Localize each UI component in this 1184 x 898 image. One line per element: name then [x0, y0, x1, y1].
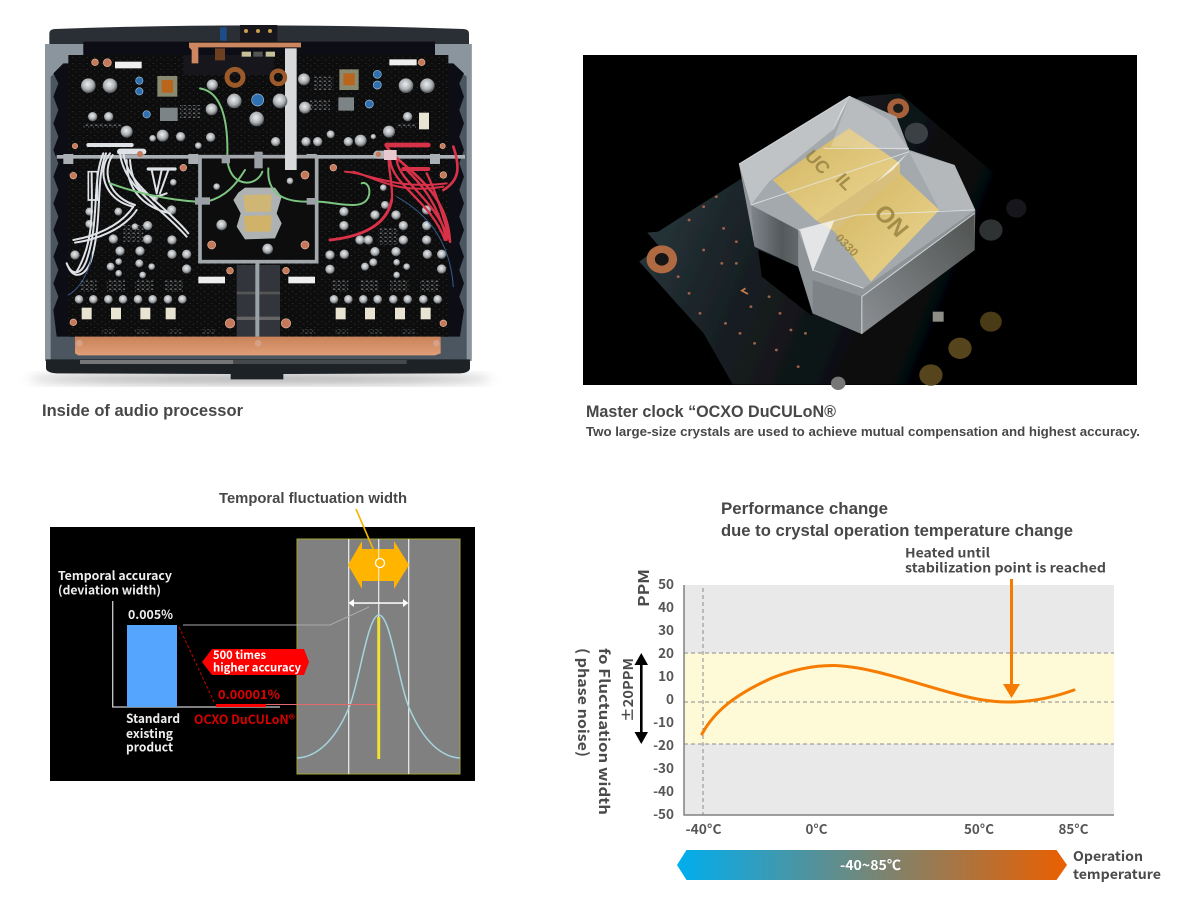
bar: standard product — [127, 625, 177, 707]
glass edges — [739, 96, 975, 334]
y axis labels: 10 — [658, 665, 674, 685]
copper screws — [70, 59, 447, 328]
x axis labels: 85°C — [1058, 818, 1089, 838]
performance curve — [702, 666, 1074, 734]
relays — [82, 113, 431, 319]
waveform panel — [297, 539, 460, 774]
badge: 500 times higher accuracy: 500 times — [213, 647, 266, 663]
y axis labels: -40 — [653, 780, 674, 800]
caption: master clock — [586, 403, 1140, 439]
transformers — [157, 69, 359, 121]
label: standard existing product: product — [126, 736, 174, 756]
engraved text on crystal: ON — [868, 201, 913, 242]
engraved text on crystal: 0330 — [832, 231, 862, 259]
label: standard existing product: existing — [126, 723, 174, 742]
annotation: heated until stabilization — [905, 542, 1106, 576]
temperature range bar: -40~85℃ — [840, 854, 902, 874]
front panel — [46, 359, 470, 379]
heading: performance change: Performance change — [721, 500, 888, 518]
glass reflections — [739, 96, 975, 272]
caption: master clock: Master clock “OCXO DuCULoN® — [586, 403, 836, 421]
bottom copper bar — [75, 337, 441, 355]
label: OCXO DuCULoN: OCXO DuCULoN® — [194, 709, 295, 728]
label: operation temperature — [1073, 845, 1161, 883]
crystal compartment — [200, 157, 317, 262]
x axis labels: -40°C — [686, 818, 722, 838]
label: temporal accuracy: Temporal accuracy — [58, 567, 172, 584]
label: standard existing product: Standard — [126, 708, 180, 727]
arrow: plus minus 20 PPM range — [634, 653, 648, 744]
value: 0.00001%: 0.00001% — [218, 684, 280, 703]
caption: master clock: Two large-size crystals are used to achieve mutual compensation and highest accuracy. — [586, 425, 1140, 439]
red wires — [330, 145, 457, 242]
label: phase noise: ( phase noise) — [573, 648, 594, 757]
label: fo fluctuation width: fo Fluctuation width — [594, 648, 615, 815]
callout leader — [356, 509, 384, 568]
y axis labels: 40 — [658, 596, 674, 616]
icon: orange double arrow — [348, 541, 409, 589]
badge: 500 times higher accuracy — [202, 647, 309, 676]
heat sink stem — [237, 263, 280, 337]
value: 0.005%: 0.005% — [128, 604, 173, 623]
front gold crystal — [835, 173, 939, 282]
y axis labels: 50 — [658, 573, 674, 593]
axes — [113, 601, 280, 707]
caption: inside of audio processor: Inside of audio processor — [42, 402, 244, 420]
crystal case — [739, 96, 975, 334]
engraved text on crystal: IL — [831, 170, 858, 194]
engraved text on crystal — [801, 146, 913, 259]
circuit board — [639, 93, 1035, 390]
heading: performance change: due to crystal operation temperature change — [721, 522, 1073, 540]
arrow: stabilization point — [1003, 579, 1020, 698]
top copper bar — [189, 43, 301, 63]
toroids — [227, 69, 285, 85]
chassis rail — [57, 154, 465, 164]
y axis labels: 0 — [666, 688, 674, 708]
connector lines — [179, 607, 377, 704]
back gold crystal — [773, 128, 900, 221]
label: standard existing product — [126, 708, 180, 756]
bell curve — [297, 615, 460, 758]
label: operation temperature: temperature — [1073, 863, 1161, 883]
chart: PPM vs temperature — [653, 573, 1114, 838]
heading: performance change — [721, 500, 1073, 540]
blue signal wires — [68, 197, 453, 295]
blue capacitors — [136, 70, 381, 118]
x axis labels: 0°C — [806, 818, 828, 838]
y axis labels: 20 — [658, 642, 674, 662]
y axis labels: -50 — [653, 803, 674, 823]
y axis labels — [653, 573, 674, 823]
y axis labels: -30 — [653, 757, 674, 777]
y axis labels: 30 — [658, 619, 674, 639]
annotation: heated until stabilization: stabilization point is reached — [905, 558, 1106, 576]
wire connectors — [195, 152, 317, 205]
axis title: PPM: PPM — [633, 569, 654, 607]
arrow: deviation width — [348, 599, 408, 607]
label: temporal accuracy: (deviation width) — [58, 582, 161, 598]
yellow centre line — [377, 617, 380, 759]
green wires — [110, 88, 369, 205]
wire clamps — [137, 150, 397, 160]
badge: 500 times higher accuracy: higher accuracy — [213, 660, 301, 676]
small surface mount parts — [80, 77, 438, 333]
y axis labels: -10 — [653, 711, 674, 731]
label: operation temperature: Operation — [1073, 845, 1143, 865]
label: plus minus 20 PPM: ±20PPM — [617, 658, 637, 722]
x axis labels — [686, 818, 1089, 838]
white ribbon — [285, 48, 297, 170]
annotation: heated until stabilization: Heated until — [905, 542, 990, 562]
white wires — [67, 145, 188, 275]
white board labels — [115, 59, 417, 283]
photo: OCXO DuCULoN crystal module — [583, 55, 1137, 390]
engraved text on crystal: UC — [801, 146, 834, 178]
x axis labels: 50°C — [964, 818, 994, 838]
heading: temporal fluctuation width: Temporal fluctuation width — [219, 490, 407, 507]
temperature range bar — [677, 850, 1067, 880]
y axis labels: -20 — [653, 734, 674, 754]
capacitors — [70, 73, 446, 304]
photo: inside of audio processor — [28, 25, 492, 383]
bar: OCXO DuCULoN — [216, 704, 266, 707]
panel: temporal accuracy diagram — [50, 509, 475, 781]
label: temporal accuracy — [58, 567, 172, 598]
